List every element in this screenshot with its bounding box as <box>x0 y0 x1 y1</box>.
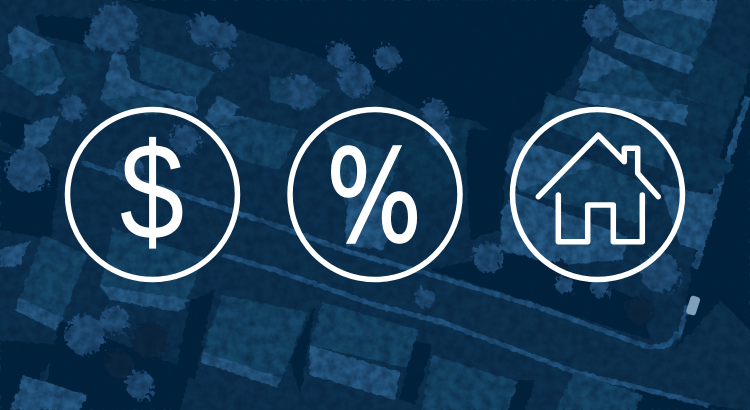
percent sign: % <box>326 123 422 272</box>
icon: dollar in circle <box>68 110 238 280</box>
house roof and chimney <box>538 135 658 197</box>
houses: darker roof faces <box>55 43 750 200</box>
car: parked white car <box>685 295 701 316</box>
curbs <box>83 97 748 405</box>
house walls and door <box>558 195 642 242</box>
icon: house in circle <box>512 110 682 280</box>
icon: percent in circle <box>290 110 460 280</box>
dollar sign: $ <box>120 116 184 269</box>
road <box>83 170 750 410</box>
